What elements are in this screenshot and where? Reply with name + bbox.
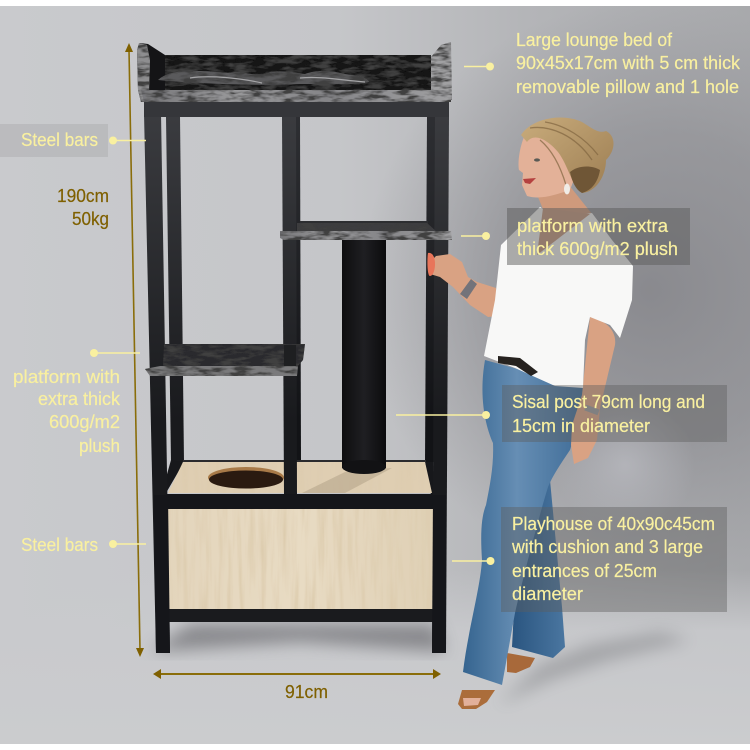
label panel: playhouse xyxy=(501,507,727,612)
lips xyxy=(523,178,536,184)
callout: sisal post: Sisal post 79cm long and xyxy=(512,392,705,412)
height and weight: 190cm xyxy=(57,186,109,206)
callout: sisal post xyxy=(396,392,705,436)
bracelet xyxy=(460,279,477,299)
front shoe xyxy=(458,690,495,709)
upper wall bar between mid and right post xyxy=(300,221,428,224)
right arm xyxy=(571,317,615,464)
callout: left platform: plush xyxy=(79,436,120,456)
white shirt xyxy=(484,207,633,388)
callout: upper platform: thick 600g/m2 plush xyxy=(517,239,678,259)
belt xyxy=(498,356,538,376)
callout: sisal post: 15cm in diameter xyxy=(512,416,650,436)
callout: lounge bed xyxy=(464,30,741,97)
callout: left platform: 600g/m2 xyxy=(49,412,120,432)
callout: playhouse: Playhouse of 40x90c45cm xyxy=(512,514,715,534)
back frame legs xyxy=(162,117,436,495)
left platform xyxy=(145,344,305,376)
height dimension arrow xyxy=(125,43,144,657)
rear jean leg xyxy=(512,470,565,658)
height and weight xyxy=(57,186,109,229)
face xyxy=(519,128,585,197)
neck xyxy=(533,180,592,214)
upper platform xyxy=(280,223,452,240)
callout: upper platform xyxy=(461,216,678,259)
woman xyxy=(427,118,633,709)
cat tree xyxy=(137,42,452,653)
callout: playhouse: diameter xyxy=(512,584,583,604)
front jean leg xyxy=(463,360,583,685)
callout: upper steel bars: Steel bars xyxy=(21,130,98,150)
callout: playhouse: with cushion and 3 large xyxy=(511,537,703,557)
label panel: sisal post xyxy=(502,385,727,442)
watch xyxy=(584,405,600,415)
neckline xyxy=(537,208,590,255)
callout: left platform: extra thick xyxy=(38,389,121,409)
left arm xyxy=(430,254,497,317)
top lounge bed xyxy=(137,42,452,102)
width label: 91cm xyxy=(285,682,328,702)
sisal post xyxy=(342,240,386,474)
label panel: steel bars xyxy=(0,124,108,157)
callout: upper steel bars xyxy=(21,130,146,150)
toes xyxy=(463,698,481,706)
removable pillow xyxy=(158,71,369,85)
nails xyxy=(427,253,435,276)
callout: lounge bed: Large lounge bed of xyxy=(516,30,673,50)
callout: lounge bed: removable pillow and 1 hole xyxy=(516,77,739,97)
playhouse xyxy=(154,494,446,653)
rear shoe xyxy=(507,653,535,673)
callout: upper platform: platform with extra xyxy=(517,216,669,236)
callout: left platform xyxy=(13,349,140,456)
eye xyxy=(534,158,540,162)
width dimension arrow xyxy=(153,669,441,679)
callout: playhouse xyxy=(452,514,715,604)
front frame xyxy=(144,102,449,653)
callout: lower steel bars: Steel bars xyxy=(21,535,98,555)
callout: playhouse: entrances of 25cm xyxy=(512,561,657,581)
earring xyxy=(564,184,570,194)
callout: lounge bed: 90x45x17cm with 5 cm thick xyxy=(516,53,741,73)
wooden floor with hole xyxy=(168,462,432,493)
label panel: upper platform xyxy=(507,208,690,265)
callout: left platform: platform with xyxy=(13,367,120,387)
hair xyxy=(521,118,614,193)
height and weight: 50kg xyxy=(72,209,109,229)
callout: lower steel bars xyxy=(21,535,146,555)
